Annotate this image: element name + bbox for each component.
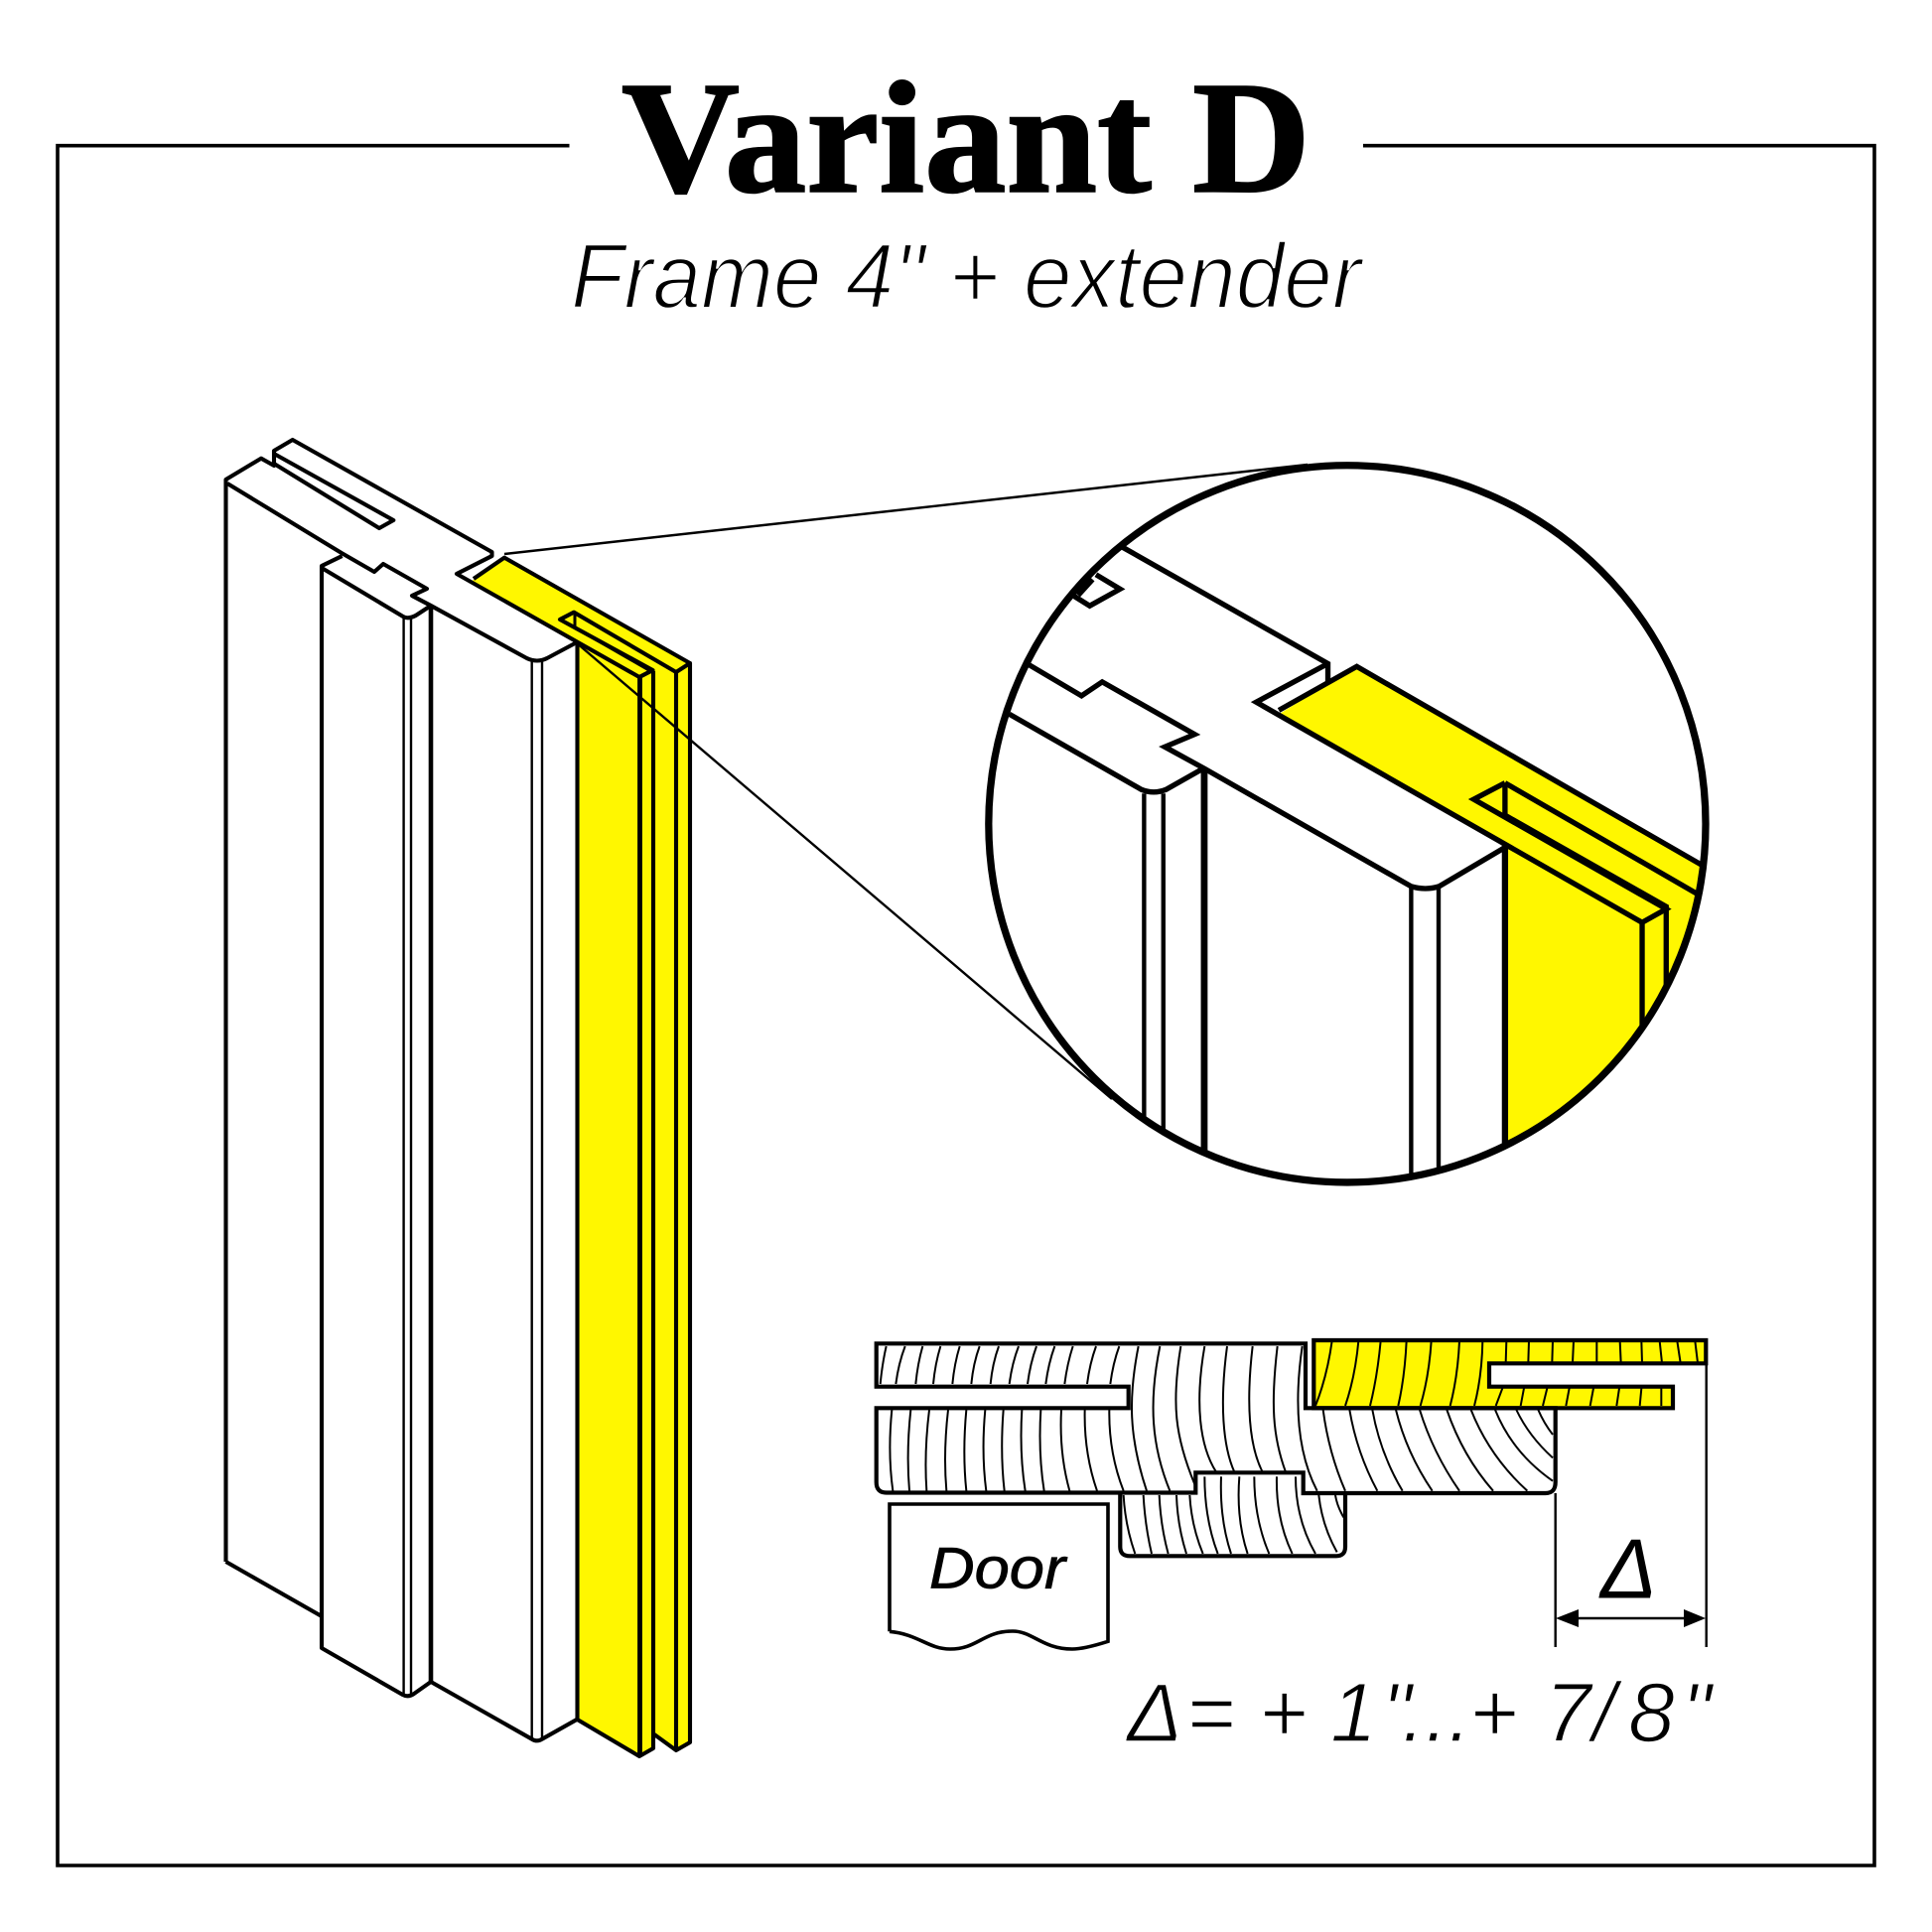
magnified frame lines [1010,547,1724,1188]
cross-section drawing [877,1340,1706,1556]
arrowheads [1556,1609,1706,1627]
title: Variant D [621,50,1311,226]
delta symbol: Δ [1598,1522,1657,1616]
wood grain [881,1341,1698,1554]
delta formula: " [1382,1666,1415,1759]
delta formula: " [1682,1666,1715,1759]
delta formula: Δ [1125,1666,1182,1759]
delta formula: / [1587,1666,1623,1759]
isometric door frame with extender [226,440,690,1756]
delta formula: + [1259,1666,1308,1759]
delta formula: ... [1402,1666,1471,1759]
subtitle: Frame 4" + extender [571,224,1365,328]
door [890,1504,1108,1649]
delta formula: = [1186,1666,1235,1759]
magnified detail circle [989,466,1753,1227]
stop section outline [1120,1494,1345,1556]
extender section fill [1313,1340,1706,1408]
extender outlines [474,558,690,1756]
dimension delta [1556,1340,1707,1647]
magnified extender fill [1281,669,1700,1140]
extender section outline [1313,1340,1706,1408]
frame jamb outline [226,440,639,1740]
delta formula: + [1469,1666,1518,1759]
delta formula: 7 [1545,1666,1594,1759]
delta formula: 1 [1330,1666,1377,1759]
callout lines to magnifier [504,465,1308,1099]
jamb section outline [877,1343,1556,1493]
door label: Door [929,1536,1068,1600]
delta formula: 8 [1628,1666,1675,1759]
extender yellow faces [471,558,690,1756]
